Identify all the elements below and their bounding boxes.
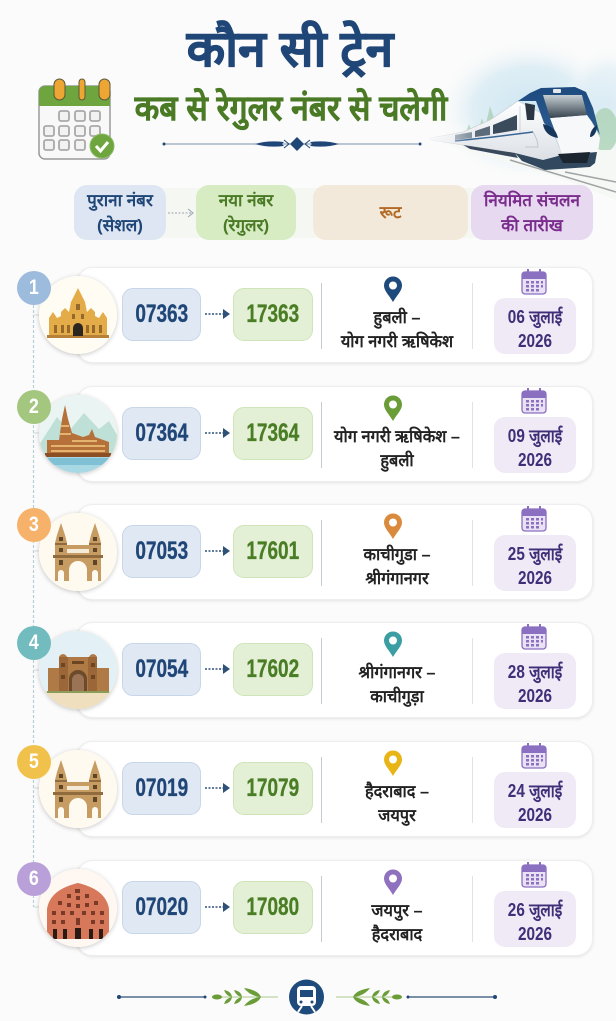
date: 2026: [518, 924, 552, 944]
date calendar icon: [521, 743, 547, 769]
header: route: रूट: [380, 203, 401, 222]
new number: [233, 762, 313, 815]
location pin: [384, 870, 402, 895]
number badge 1: 1: [29, 276, 39, 299]
number badge 5: [17, 745, 51, 779]
landmark: hawa mahal: [39, 869, 117, 947]
new number: 17364: [247, 418, 299, 446]
card background: [76, 741, 593, 837]
header: old number: [74, 185, 166, 240]
date: 09 जुलाई: [508, 426, 562, 446]
old number: 07053: [135, 537, 188, 565]
old number: 07363: [135, 300, 188, 328]
route: हैदराबाद –: [365, 782, 429, 801]
date: [494, 416, 576, 472]
landmark: charminar: [39, 513, 117, 591]
date: 2026: [518, 450, 552, 470]
route: योग नगरी ऋषिकेश: [341, 332, 453, 351]
old number: [122, 288, 201, 341]
date: [494, 772, 576, 828]
header arrow: [168, 208, 194, 218]
date: 06 जुलाई: [508, 307, 562, 327]
new number: 17079: [247, 774, 299, 802]
route: हैदराबाद: [372, 925, 422, 944]
date calendar icon: [521, 624, 547, 650]
arrow: [205, 546, 230, 556]
number badge 3: [17, 508, 51, 542]
title ornament divider: [162, 137, 422, 151]
route: काचीगुडा –: [363, 545, 431, 564]
ground: [440, 142, 616, 200]
header: route: [313, 185, 468, 240]
number badge 1: [17, 271, 51, 305]
old number: 07020: [135, 893, 188, 921]
date: 2026: [518, 805, 552, 825]
route: काचीगुड़ा: [370, 687, 424, 706]
header: regular operation date: की तारीख: [501, 216, 563, 235]
location pin: [384, 632, 402, 657]
new number: [233, 406, 313, 460]
new number: 17080: [247, 893, 299, 921]
new number: 17602: [247, 655, 299, 683]
route: जयपुर –: [371, 901, 423, 920]
date: 26 जुलाई: [508, 900, 562, 920]
new number: [233, 525, 313, 578]
route: हुबली –: [374, 308, 420, 327]
timeline connector: [32, 305, 39, 908]
footer ornament with train icon: [117, 980, 497, 1014]
header: old number: (सेशल): [97, 216, 143, 235]
route: श्रीगंगानगर –: [359, 663, 435, 682]
date calendar icon: [521, 506, 547, 532]
arrow: [205, 664, 230, 674]
date calendar icon: [521, 269, 547, 295]
date: 28 जुलाई: [508, 662, 562, 682]
arrow: [205, 783, 230, 793]
new number: [233, 643, 313, 696]
number badge 6: 6: [29, 867, 39, 890]
date: 25 जुलाई: [508, 544, 562, 564]
old number: [122, 406, 201, 460]
old number: 07054: [135, 655, 188, 683]
title: कौन सी ट्रेन: [187, 21, 393, 77]
card background: [76, 860, 593, 956]
row 3: [17, 504, 594, 602]
landmark: charminar: [39, 750, 117, 828]
number badge 4: 4: [29, 631, 39, 654]
date calendar icon: [521, 862, 547, 888]
header: regular operation date: [471, 185, 593, 240]
number badge 2: [17, 390, 51, 424]
route: योग नगरी ऋषिकेश –: [334, 426, 460, 446]
location pin: [384, 396, 402, 421]
header: new number: (रेगुलर): [223, 216, 269, 235]
row 1: [17, 267, 594, 364]
landmark: fort gate: [39, 631, 117, 709]
card background: [76, 622, 593, 718]
date: [494, 653, 576, 709]
card background: [76, 386, 593, 482]
date calendar icon: [521, 388, 547, 414]
number badge 6: [17, 862, 51, 896]
date: [494, 891, 576, 947]
new number: 17363: [247, 300, 299, 328]
train: [430, 87, 600, 170]
location pin: [384, 276, 402, 302]
route: जयपुर: [378, 806, 416, 825]
number badge 5: 5: [29, 750, 39, 773]
route: [340, 308, 454, 351]
arrow: [205, 428, 230, 438]
old number: [122, 525, 201, 578]
number badge 4: [17, 626, 51, 660]
route: [334, 426, 460, 472]
new number: [233, 881, 313, 934]
old number: [122, 762, 201, 815]
old number: 07364: [135, 418, 188, 446]
date: [494, 535, 576, 591]
route: [363, 544, 431, 588]
number badge 3: 3: [29, 513, 39, 536]
row 4: [17, 622, 594, 720]
date: 2026: [518, 568, 552, 588]
calendar icon with check: [38, 78, 114, 160]
header scenery: sky, trees and train: [430, 54, 616, 193]
date: 24 जुलाई: [508, 781, 562, 801]
location pin: [384, 750, 402, 776]
row 6: [17, 860, 594, 958]
row 5: [17, 741, 594, 838]
new number: [233, 288, 313, 341]
location pin: [384, 514, 402, 539]
subtitle: कब से रेगुलर नंबर से चलेगी: [135, 89, 447, 128]
route: [364, 782, 429, 826]
route: हुबली: [380, 450, 414, 470]
old number: [122, 881, 201, 934]
header: new number: [196, 185, 296, 240]
date: 2026: [518, 331, 552, 351]
header: old number: पुराना नंबर: [87, 191, 153, 210]
header: regular operation date: नियमित संचलन: [484, 191, 580, 210]
date: 2026: [518, 686, 552, 706]
card background: [76, 267, 593, 363]
route: [358, 662, 435, 707]
landmark: ghat temple: [39, 394, 117, 472]
arrow: [205, 902, 230, 912]
old number: 07019: [135, 774, 188, 802]
route: [371, 901, 423, 944]
card background: [76, 504, 593, 600]
rails: [510, 160, 616, 192]
date: [494, 298, 576, 354]
header: new number: नया नंबर: [219, 191, 273, 210]
route: श्रीगंगानगर: [365, 569, 429, 588]
table header band: [80, 188, 585, 238]
old number: [122, 643, 201, 696]
number badge 2: 2: [29, 394, 39, 418]
landmark: golden palace: [39, 276, 117, 354]
new number: 17601: [247, 537, 299, 565]
arrow: [205, 309, 230, 319]
row 2: [17, 386, 594, 484]
